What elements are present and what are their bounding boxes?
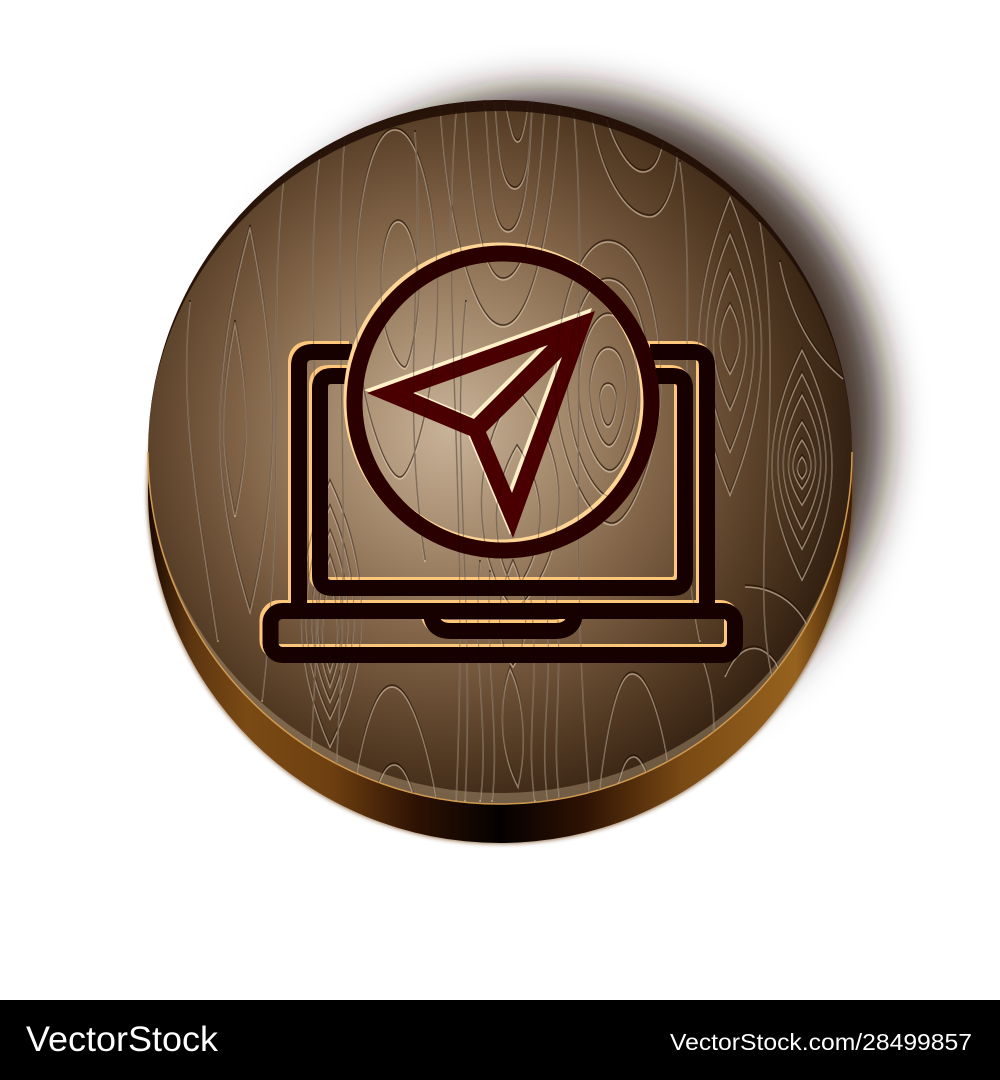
icon: laptop with navigation arrow [268, 250, 735, 655]
footer bar [0, 1000, 1000, 1080]
grain over icon [187, 100, 843, 800]
drop shadow [215, 90, 885, 760]
circle highlight [352, 250, 648, 548]
image id url: VectorStock.com/28499857 [670, 1029, 972, 1055]
top dark edge band [148, 100, 850, 435]
laptop dark outline [270, 352, 735, 655]
gold face edge [148, 452, 852, 804]
laptop highlight [268, 349, 732, 652]
navigation arrow dark [367, 311, 595, 538]
button face [148, 100, 852, 804]
bottom light edge band [158, 526, 844, 804]
navigation arrow highlight [364, 308, 592, 535]
rim glow [147, 138, 853, 844]
wooden button [147, 100, 853, 844]
wood grain [187, 100, 843, 802]
circle dark [354, 254, 652, 550]
button rim [148, 139, 852, 843]
brand logo text: VectorStock [26, 1020, 219, 1059]
